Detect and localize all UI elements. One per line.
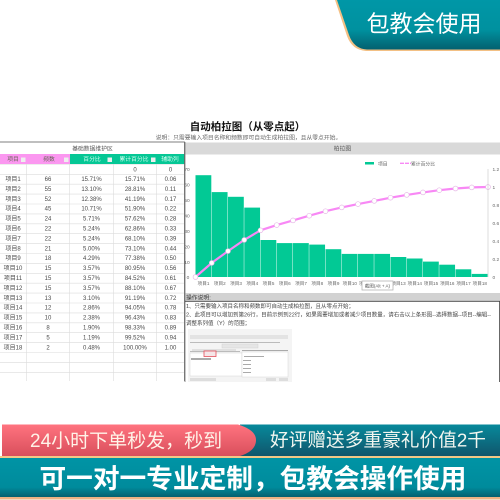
x axis labels: 项目15 [424, 281, 439, 287]
table rows: 0.17 [165, 197, 177, 203]
table rows: 0.50 [165, 256, 177, 262]
table rows: 21 [45, 246, 52, 252]
table rows: 3.57% [83, 276, 101, 282]
table column headers: 项目 [7, 156, 19, 163]
table rows: 项目17 [4, 334, 23, 341]
x axis labels: 项目9 [328, 281, 340, 287]
left axis labels: 60 [184, 182, 190, 188]
x axis labels: 项目13 [391, 281, 406, 287]
banner: customization: 可一对一专业定制，包教会操作使用 [40, 464, 466, 494]
instructions text: 2、此项目可以增加到第26行，目前示例到22行，如果需要增加或者减少项目数量，请右击以上条形图--选择数据--项目--编辑-- [186, 310, 491, 318]
badge: top right: 包教会使用 [366, 10, 482, 36]
right axis [488, 167, 500, 281]
legend: 项目 [378, 162, 388, 168]
table rows: 5.24% [83, 226, 101, 232]
table column headers [0, 154, 184, 164]
table rows: 0.11 [165, 187, 177, 193]
table column headers: 频数 [43, 155, 55, 163]
table rows: 66 [45, 177, 52, 183]
screenshot tooltip [362, 281, 393, 290]
table rows: 5.71% [83, 217, 101, 223]
table rows: 22 [45, 236, 52, 242]
table heading: 基础数据维护区 [72, 144, 113, 152]
table column headers: 累计百分比 [120, 155, 149, 163]
x axis labels: 项目16 [440, 281, 455, 287]
x axis labels: 项目2 [214, 281, 226, 287]
table rows [4, 168, 177, 351]
table rows: 15.71% [125, 177, 146, 183]
table rows: 15 [45, 286, 52, 292]
badge: top right [335, 0, 500, 51]
instructions text: 1、只需要输入项目名称和频数即可自动生成柏拉图，且从零点开始； [186, 302, 354, 310]
table rows: 57.62% [125, 217, 146, 223]
table rows: 52 [45, 197, 52, 203]
left axis labels: 70 [184, 167, 190, 173]
x axis labels: 项目11 [359, 281, 373, 287]
table rows: 项目3 [5, 196, 21, 203]
left axis labels: 40 [184, 214, 190, 220]
cumulative percentage line [193, 185, 490, 279]
table rows: 15 [45, 266, 52, 272]
subtitle: 说明：只需要输入项目名称和频数即可自动生成柏拉图，且从零点开始。 [156, 134, 341, 142]
x axis labels: 项目1 [198, 281, 210, 287]
table rows: 28.81% [125, 187, 146, 193]
table rows: 项目18 [4, 344, 23, 351]
table rows: 13 [45, 296, 52, 302]
table rows: 98.33% [125, 326, 146, 332]
screenshot tooltip: 截图(Alt + A) [365, 282, 391, 290]
table rows: 5.00% [83, 246, 101, 252]
table rows: 41.19% [125, 197, 146, 203]
right axis: 0 [492, 275, 496, 281]
instructions text: 调整系列值（Y）的范围； [186, 319, 250, 327]
table rows: 项目13 [4, 295, 23, 302]
right axis: 0.4 [492, 239, 500, 245]
table rows: 1.19% [83, 335, 101, 341]
table rows: 项目16 [4, 324, 23, 332]
table rows: 10 [45, 316, 52, 322]
table rows: 8 [46, 326, 50, 332]
table rows: 80.95% [125, 266, 146, 272]
x axis labels: 项目7 [295, 281, 307, 287]
left axis labels: 50 [184, 198, 190, 204]
table rows: 51.90% [125, 207, 146, 213]
table rows: 项目14 [4, 305, 23, 312]
table rows: 项目12 [4, 285, 23, 292]
table rows: 0.44 [165, 246, 177, 252]
table rows: 项目5 [5, 216, 21, 223]
x axis labels: 项目4 [246, 281, 259, 287]
table rows: 项目2 [5, 186, 21, 193]
table rows: 0.06 [165, 177, 177, 183]
x axis labels: 项目10 [343, 281, 357, 287]
table rows: 94.05% [125, 306, 146, 312]
table rows: 项目11 [4, 275, 23, 282]
x axis labels: 项目17 [456, 281, 471, 287]
title: 自动柏拉图（从零点起） [190, 120, 305, 133]
table rows: 10.71% [81, 207, 102, 213]
table heading [0, 142, 184, 154]
x axis labels: 项目6 [279, 281, 291, 287]
right axis: 1.2 [492, 167, 500, 173]
table rows: 13.10% [81, 187, 102, 193]
chart heading [185, 142, 500, 154]
legend [365, 160, 435, 168]
x axis labels: 项目8 [311, 281, 324, 287]
x axis labels: 项目12 [375, 281, 390, 287]
table rows: 15 [45, 276, 52, 282]
table rows: 3.57% [83, 286, 101, 292]
table rows: 0.56 [165, 266, 177, 272]
table rows: 12 [45, 306, 52, 312]
x axis labels: 项目5 [263, 281, 275, 287]
x axis labels [198, 281, 487, 287]
table rows: 1.90% [83, 326, 101, 332]
table rows: 2.86% [83, 306, 101, 312]
instructions text [186, 302, 491, 327]
table rows: 45 [45, 207, 52, 213]
instructions heading [186, 293, 500, 302]
table rows: 项目1 [5, 176, 21, 183]
table rows: 0.22 [165, 207, 177, 213]
table rows: 项目6 [5, 226, 21, 232]
table rows: 3.57% [83, 266, 101, 272]
table rows: 0.39 [165, 236, 177, 242]
instructions heading: 操作说明: [186, 294, 211, 302]
table rows: 55 [45, 187, 52, 193]
legend: 累计百分比 [411, 160, 435, 168]
right axis: 1 [492, 185, 496, 191]
table rows: 68.10% [125, 236, 146, 242]
table rows: 4.29% [83, 256, 101, 262]
table rows: 12.38% [81, 197, 102, 203]
table rows: 0.89 [165, 326, 177, 332]
table rows: 0.61 [165, 276, 177, 282]
table rows: 62.86% [125, 226, 146, 232]
table rows: 0.48% [83, 345, 101, 351]
table rows: 77.38% [125, 256, 146, 262]
x axis labels: 项目18 [473, 281, 487, 287]
left axis labels: 20 [184, 244, 190, 250]
left axis labels: 30 [184, 229, 190, 235]
table rows: 100.00% [123, 345, 148, 351]
table rows: 0.67 [165, 286, 177, 292]
table column headers: 百分比 [83, 155, 101, 163]
table rows: 0.83 [165, 316, 177, 322]
dialog screenshot [188, 329, 292, 382]
table rows: 73.10% [125, 246, 146, 252]
left axis labels: 10 [184, 260, 190, 266]
bars [196, 175, 488, 277]
table rows: 99.52% [125, 335, 146, 341]
x axis labels: 项目3 [230, 281, 242, 287]
table rows: 项目4 [5, 206, 21, 213]
table rows: 96.43% [125, 316, 146, 322]
table rows: 24 [45, 217, 52, 223]
left axis labels [184, 167, 190, 281]
banner: red fast delivery [2, 424, 500, 456]
panel: data table [0, 142, 184, 381]
table rows: 项目9 [5, 255, 21, 262]
table rows: 项目8 [5, 245, 21, 252]
table column headers: 辅助列 [161, 155, 179, 163]
table rows: 0.94 [165, 335, 177, 341]
right axis: 0.6 [492, 221, 500, 227]
table rows: 2.38% [83, 316, 101, 322]
banner: customization [0, 456, 500, 500]
table rows: 2 [46, 345, 50, 351]
table rows: 0.33 [165, 226, 177, 232]
panel: pareto chart [184, 142, 500, 292]
right axis: 0.2 [492, 257, 500, 263]
table rows: 88.10% [125, 286, 146, 292]
x axis labels: 项目14 [408, 281, 422, 287]
table rows: 0.28 [165, 217, 177, 223]
chart heading: 柏拉图 [334, 144, 351, 152]
table rows: 84.52% [125, 276, 146, 282]
banner: gift text: 好评赠送多重豪礼价值2千 [270, 430, 486, 450]
table rows: 项目15 [4, 315, 23, 322]
table rows: 22 [45, 226, 52, 232]
panel: instructions [185, 293, 500, 382]
table rows: 0.72 [165, 296, 177, 302]
banner: red fast delivery: 24小时下单秒发，秒到 [30, 430, 222, 452]
table rows: 18 [45, 256, 52, 262]
left axis labels: 0 [187, 275, 190, 281]
table rows: 5 [46, 335, 50, 341]
table rows: 0 [133, 168, 137, 174]
table rows: 项目7 [5, 235, 21, 242]
table rows: 3.10% [83, 296, 101, 302]
table rows: 1.00 [165, 345, 177, 351]
table rows: 项目10 [4, 265, 23, 272]
right axis: 0.8 [492, 203, 500, 209]
table rows: 5.24% [83, 236, 101, 242]
table rows: 15.71% [81, 177, 102, 183]
table rows: 91.19% [125, 296, 146, 302]
table rows: 0 [169, 168, 173, 174]
table rows: 0.78 [165, 306, 177, 312]
